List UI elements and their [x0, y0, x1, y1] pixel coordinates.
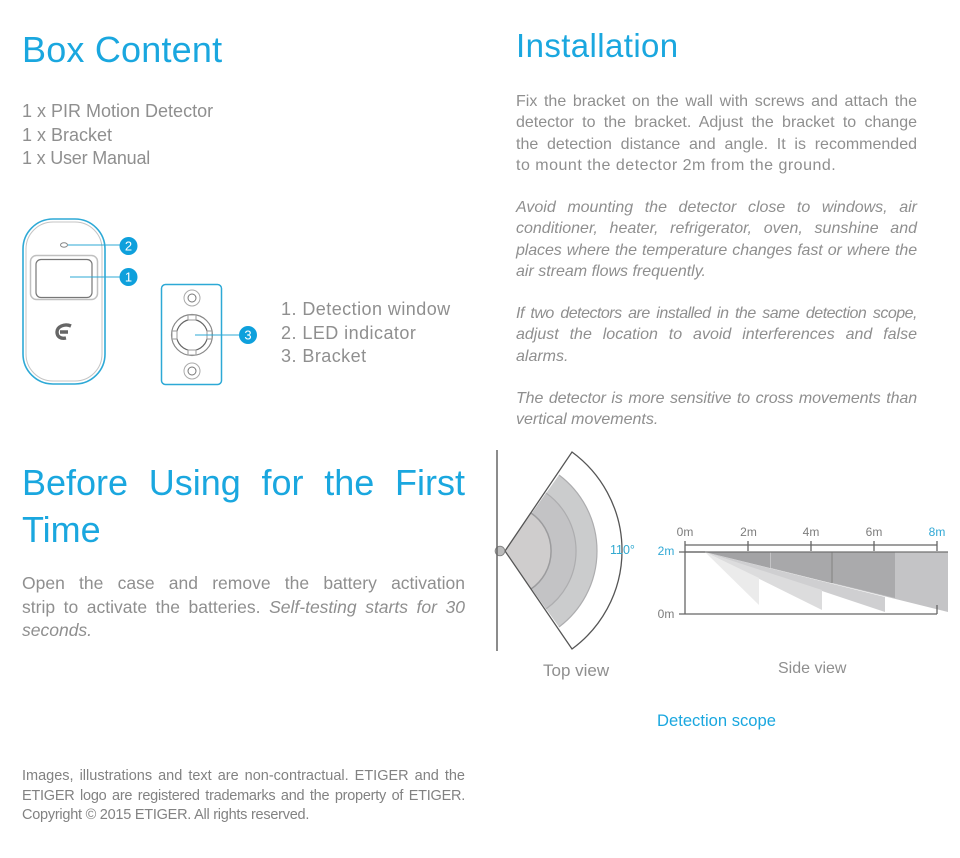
callouts 1 and 2: 2 — [125, 238, 132, 254]
legend: parts list: 1. Detection window — [281, 299, 451, 319]
caption: top view: Top view — [543, 661, 609, 680]
heading: before using for the first time — [22, 462, 465, 550]
text: legal notice — [22, 768, 465, 823]
text: installation instructions: Fix the bracket on the wall with screws and attach the — [516, 93, 917, 110]
side view detection diagram: 8m — [929, 525, 945, 539]
text: before using instructions: seconds. — [22, 620, 92, 640]
callouts 1 and 2 — [120, 237, 138, 286]
text: installation instructions: detector to the bracket. Adjust the bracket to change — [516, 114, 917, 131]
text: installation instructions — [516, 93, 917, 174]
heading: before using for the first time: Before Using for the First — [22, 462, 465, 503]
text: interference note: alarms. — [516, 348, 568, 365]
side view detection diagram: 2m — [740, 525, 757, 539]
text: sensitivity note: The detector is more sensitive to cross movements than — [516, 390, 917, 407]
legend: parts list: 2. LED indicator — [281, 323, 416, 343]
text: interference note — [516, 305, 917, 365]
bracket — [162, 284, 240, 384]
side view detection diagram: 6m — [866, 525, 882, 539]
text: box content list — [22, 101, 213, 168]
caption: side view: Side view — [778, 660, 846, 677]
text: before using instructions — [22, 573, 465, 640]
top view detection diagram: 110° — [610, 543, 635, 557]
text: installation instructions: to mount the detector 2m from the ground. — [516, 157, 836, 174]
text: installation instructions: the detection distance and angle. It is recommended — [516, 136, 917, 153]
side view detection diagram: 4m — [803, 525, 819, 539]
callout 3: 3 — [244, 328, 252, 342]
text: mounting warning — [515, 199, 918, 280]
callout 3 — [239, 326, 257, 344]
text: mounting warning: air stream flows frequently. — [516, 263, 706, 280]
side view detection diagram: 0m — [658, 607, 674, 621]
text: interference note: If two detectors are installed in the same detection scope, — [516, 305, 917, 322]
top view detection diagram — [495, 450, 635, 651]
text: sensitivity note: vertical movements. — [516, 411, 658, 428]
text: legal notice: ETIGER logo are registered trademarks and the property of ETIGER. — [22, 788, 465, 804]
side view detection diagram: 2m — [658, 544, 674, 558]
text: legal notice: Copyright © 2015 ETIGER. All rights reserved. — [22, 807, 309, 823]
heading: installation: Installation — [516, 27, 679, 64]
legend: parts list: 3. Bracket — [281, 346, 367, 366]
side view detection diagram: 0m — [677, 525, 693, 539]
text: mounting warning: Avoid mounting the detector close to windows, air — [516, 199, 917, 216]
caption: detection scope: Detection scope — [657, 711, 776, 730]
text: legal notice: Images, illustrations and text are non-contractual. ETIGER and the — [22, 768, 465, 784]
text: before using instructions: Open the case and remove the battery activation — [22, 573, 465, 593]
text: box content list: 1 x User Manual — [22, 148, 150, 168]
text: interference note: adjust the location to avoid interferences and false — [516, 326, 917, 343]
text: before using instructions: strip to activate the batteries. Self-testing starts for 30 — [22, 596, 465, 616]
heading: box content: Box Content — [22, 29, 222, 70]
side view detection diagram — [658, 525, 948, 621]
callouts 1 and 2: 1 — [125, 270, 132, 284]
device body — [23, 219, 120, 384]
heading: before using for the first time: Time — [22, 508, 101, 550]
text: box content list: 1 x Bracket — [22, 125, 112, 145]
text: mounting warning: places where the temperature changes fast or where the — [516, 242, 917, 259]
text: sensitivity note — [516, 390, 917, 428]
text: box content list: 1 x PIR Motion Detector — [22, 101, 213, 121]
text: mounting warning: conditioner, heater, refrigerator, oven, sunshine and — [516, 220, 917, 237]
legend: parts list — [281, 299, 451, 366]
